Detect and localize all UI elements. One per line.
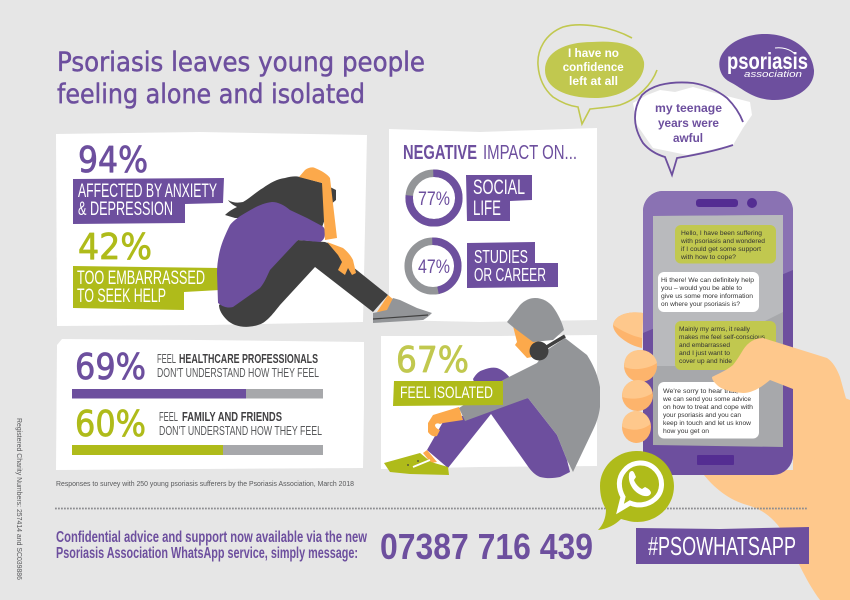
chat message 1: if I could get some support	[681, 246, 761, 253]
chat message 3: cover up and hide	[679, 358, 732, 365]
text: healthcare professionals: DON'T UNDERSTAND HOW THEY FEEL	[157, 365, 319, 380]
panel: feel isolated	[381, 335, 597, 469]
text: family and friends: FAMILY AND FRIENDS	[182, 409, 282, 424]
finger 3	[622, 380, 653, 411]
chat message 4: your psoriasis and you can	[663, 412, 741, 419]
chat message 1: Hello, I have been suffering	[681, 230, 762, 237]
legs	[427, 398, 570, 478]
illustration: hooded teen	[384, 298, 600, 478]
chat message 1: with psoriasis and wondered	[680, 238, 765, 245]
chat message 2: Hi there! We can definitely help	[661, 277, 754, 284]
shoe	[373, 295, 432, 323]
hashtag	[636, 527, 809, 564]
chat message 4: We're sorry to hear that,	[663, 388, 738, 395]
stat: 69%: 69%	[75, 347, 146, 388]
speech bubble: teenage years: awful	[673, 131, 703, 145]
text: healthcare professionals: FEEL	[157, 351, 176, 366]
text: family and friends: DON'T UNDERSTAND HOW THEY FEEL	[159, 423, 322, 438]
label: studies or career	[467, 242, 558, 288]
divider dots	[55, 508, 808, 510]
sweater	[217, 202, 325, 308]
donut: 47%	[408, 241, 458, 291]
label: studies or career: OR CAREER	[474, 265, 546, 285]
panel: negative impact	[389, 128, 597, 322]
label: too embarrassed to seek help	[73, 266, 220, 310]
title: Psoriasis leaves young people	[57, 47, 425, 78]
arm over head	[299, 167, 337, 240]
chat message 4: how you get on	[663, 428, 709, 435]
icon: whatsapp bubble	[598, 451, 674, 530]
bar: 69%	[72, 389, 323, 398]
call to action text: Psoriasis Association WhatsApp service, simply message:	[56, 545, 358, 562]
chat message 2	[658, 272, 759, 312]
chat message 3: Mainly my arms, it really	[679, 326, 751, 333]
speech bubble: teenage years: years were	[658, 116, 719, 130]
donut: 77%	[409, 173, 459, 223]
label: affected by anxiety and depression: & DEPRESSION	[78, 199, 173, 220]
logo: psoriasis association: association	[744, 69, 802, 79]
panel: anxiety and embarrassment	[56, 132, 367, 326]
speech bubble: no confidence: I have no	[568, 46, 619, 60]
shoe	[384, 453, 449, 475]
chat message 2: you – would you be able to	[661, 285, 742, 292]
label: too embarrassed to seek help: TOO EMBARRASSED	[77, 268, 205, 289]
stat: 94%: 94%	[78, 140, 148, 181]
speech bubble: teenage years: my teenage	[655, 101, 722, 115]
footnote: Responses to survey with 250 young psoriasis sufferers by the Psoriasis Association, March 2018	[56, 479, 354, 488]
heading: negative impact on	[403, 142, 577, 164]
label: feel isolated: FEEL ISOLATED	[400, 384, 493, 402]
panel: healthcare and family bars	[56, 339, 364, 470]
fingers	[613, 312, 657, 443]
label: social life: SOCIAL	[473, 176, 525, 199]
illustration: sitting woman	[217, 167, 432, 327]
thumb	[712, 338, 850, 470]
chat message 4: on how to treat and cope with	[663, 404, 753, 411]
chat message 3: makes me feel self-conscious	[679, 334, 766, 341]
chat message 1: with how to cope?	[680, 254, 736, 261]
stat: 67%: 67%	[396, 340, 469, 381]
title: feeling alone and isolated	[57, 79, 365, 110]
call to action text: Confidential advice and support now available via the new	[56, 529, 367, 546]
label: social life: LIFE	[473, 197, 501, 220]
label: affected by anxiety and depression: AFFECTED BY ANXIETY	[78, 181, 217, 202]
call to action text	[56, 529, 367, 562]
chat message 4: keep in touch and let us know	[663, 420, 751, 427]
hoodie	[459, 338, 600, 472]
chat message 3: and embarrassed	[679, 342, 730, 349]
speech bubble: no confidence: confidence	[563, 60, 624, 74]
label: affected by anxiety and depression	[73, 178, 224, 224]
donut: 47%: 47%	[418, 257, 450, 278]
chat message 2: give us some more information	[661, 293, 753, 300]
label: studies or career: STUDIES	[474, 247, 528, 267]
speech bubble: teenage years	[633, 82, 752, 175]
title	[57, 47, 425, 110]
label: social life	[466, 175, 532, 221]
chat message 1	[675, 225, 776, 264]
chat message 3: and I just want to	[679, 350, 730, 357]
hand behind phone	[700, 380, 850, 600]
finger 1	[613, 312, 643, 348]
chat message 2: on where your psoriasis is?	[661, 301, 740, 308]
label: feel isolated	[393, 381, 503, 406]
hair	[225, 176, 336, 230]
headphones	[530, 336, 565, 360]
text: family and friends: FEEL	[159, 409, 178, 424]
text: family and friends	[159, 409, 322, 438]
charity numbers: Registered Charity Numbers: 257414 and SC039886	[15, 418, 24, 580]
finger 4	[622, 411, 651, 443]
phone with chat	[643, 191, 793, 475]
hand	[428, 407, 463, 436]
hand on knee	[327, 242, 356, 275]
legs	[219, 240, 388, 327]
chat message 3	[675, 321, 776, 370]
speech bubble: no confidence	[538, 25, 657, 124]
text: healthcare professionals: HEALTHCARE PROFESSIONALS	[179, 351, 318, 366]
phone number: 07387 716 439	[380, 526, 593, 567]
logo: psoriasis association	[719, 34, 814, 100]
ankle	[423, 450, 437, 463]
chat message 4	[658, 382, 759, 438]
hood	[507, 298, 564, 342]
stat: 42%: 42%	[78, 227, 152, 268]
bar: 60%	[72, 445, 323, 455]
text: healthcare professionals	[157, 351, 319, 380]
donut: 77%: 77%	[418, 189, 450, 210]
heading: negative impact on: IMPACT ON...	[483, 142, 577, 164]
finger 2	[624, 350, 657, 382]
logo: psoriasis association: psoriasis	[727, 48, 808, 74]
far knee	[473, 368, 510, 385]
speech bubble: no confidence: left at all	[569, 74, 618, 88]
chat message 4: we can send you some advice	[662, 396, 751, 403]
label: too embarrassed to seek help: TO SEEK HELP	[77, 286, 166, 307]
heading: negative impact on: NEGATIVE	[403, 142, 477, 164]
stat: 60%: 60%	[75, 404, 146, 445]
face	[513, 326, 540, 358]
